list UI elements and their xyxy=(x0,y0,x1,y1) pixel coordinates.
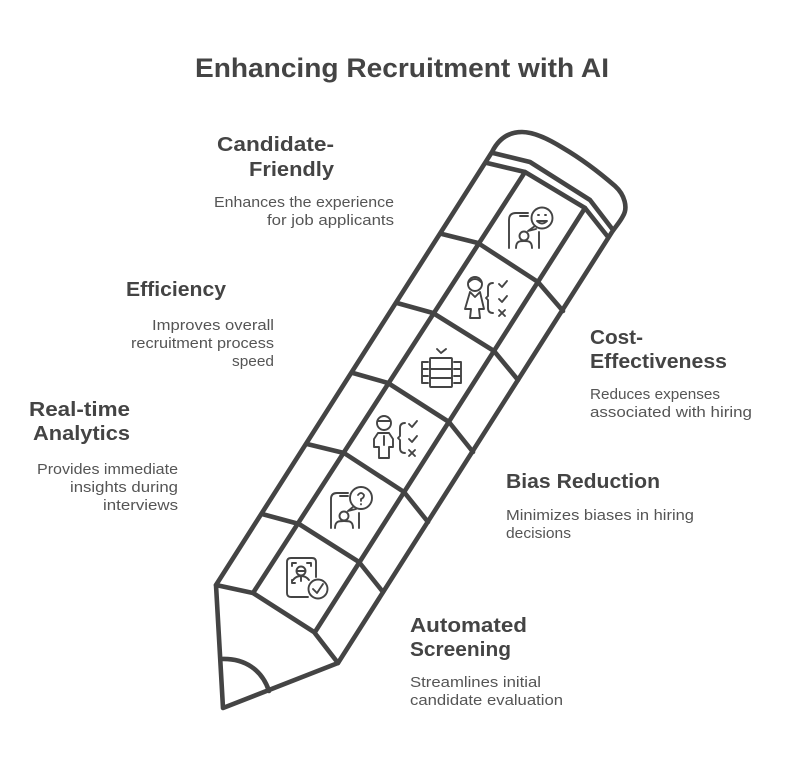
text: efficiency: speed xyxy=(232,353,274,370)
text: real-time analytics: Real-time xyxy=(29,399,130,421)
text: cost-effectiveness xyxy=(590,327,752,421)
text: bias reduction: Bias Reduction xyxy=(506,471,660,493)
text: efficiency: recruitment process xyxy=(131,335,274,352)
pencil long dividers xyxy=(253,172,585,632)
icon: face scan with check xyxy=(287,558,328,598)
text: automated screening: Screening xyxy=(410,639,511,661)
pencil tip arc xyxy=(221,659,269,691)
icon: candidate with question xyxy=(331,487,372,528)
icon: candidate smiling xyxy=(509,208,552,248)
text: real-time analytics: Provides immediate xyxy=(37,461,178,478)
text: bias reduction: decisions xyxy=(506,525,571,542)
text: cost-effectiveness: Reduces expenses xyxy=(590,386,720,403)
text: candidate-friendly: Enhances the experience xyxy=(214,194,394,211)
text: real-time analytics: Analytics xyxy=(33,423,130,445)
text: automated screening xyxy=(410,615,563,709)
text: cost-effectiveness: associated with hiring xyxy=(590,404,752,421)
pencil outline xyxy=(216,132,625,708)
icon: woman with checklist xyxy=(465,277,507,318)
pencil ferrule bands xyxy=(487,153,613,237)
text: candidate-friendly: Candidate- xyxy=(217,134,334,156)
text: bias reduction xyxy=(506,471,694,542)
text: real-time analytics: insights during xyxy=(70,479,178,496)
text: cost-effectiveness: Cost- xyxy=(590,327,643,349)
text: automated screening: Streamlines initial xyxy=(410,674,541,691)
pencil illustration xyxy=(216,132,625,708)
text: real-time analytics: interviews xyxy=(103,497,178,514)
text: candidate-friendly xyxy=(214,134,394,229)
icon: database stack with check xyxy=(422,349,461,387)
icon: man with checklist xyxy=(374,416,417,458)
text: cost-effectiveness: Effectiveness xyxy=(590,351,727,373)
text: automated screening: candidate evaluation xyxy=(410,692,563,709)
text: automated screening: Automated xyxy=(410,615,527,637)
pencil cross bands xyxy=(216,234,563,663)
text: efficiency: Efficiency xyxy=(126,279,227,301)
text: efficiency: Improves overall xyxy=(152,317,274,334)
text: candidate-friendly: Friendly xyxy=(249,159,335,181)
title: Enhancing Recruitment with AI xyxy=(195,53,609,83)
text: real-time analytics xyxy=(29,399,178,514)
text: bias reduction: Minimizes biases in hiring xyxy=(506,507,694,524)
text: candidate-friendly: for job applicants xyxy=(267,212,394,229)
text: efficiency xyxy=(126,279,274,370)
